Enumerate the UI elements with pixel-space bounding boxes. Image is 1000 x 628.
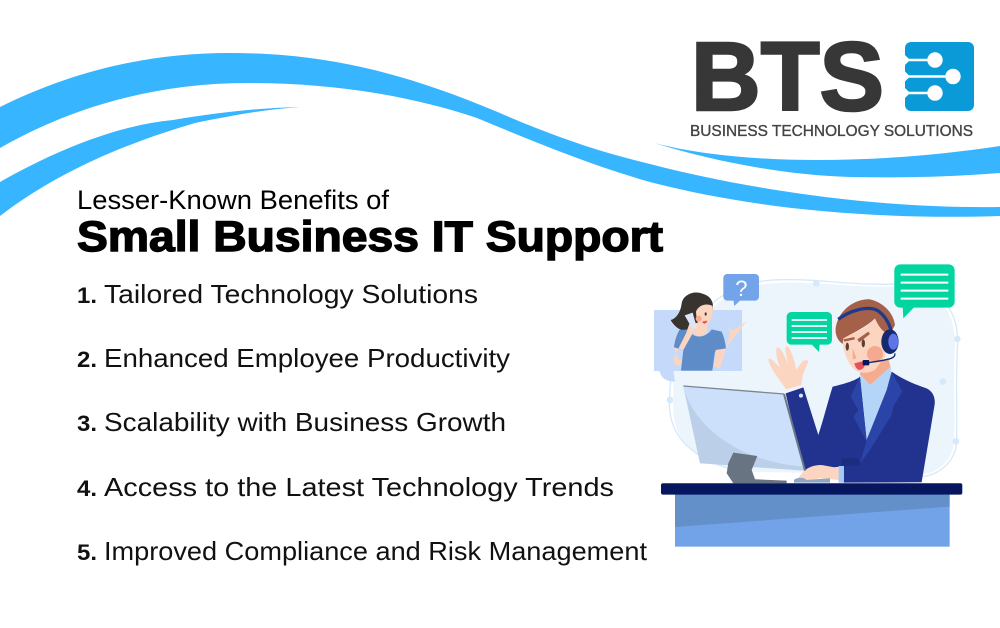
illustration: IT support agent at desk <box>654 264 962 547</box>
woman neck <box>691 322 707 338</box>
agent lapels <box>851 377 867 442</box>
item 1: Tailored Technology Solutions <box>104 279 478 309</box>
wave: right swoosh under logo <box>654 143 1000 177</box>
agent typing hand <box>798 465 839 482</box>
small chat bubble <box>787 312 832 352</box>
logo wordmark: BTS <box>691 22 884 131</box>
agent shirt <box>860 367 892 442</box>
eyes and brows <box>843 332 870 351</box>
item 5: 5. <box>77 540 97 565</box>
logo tagline: BUSINESS TECHNOLOGY SOLUTIONS <box>690 123 973 140</box>
logo <box>690 22 974 140</box>
agent suit <box>786 372 935 483</box>
woman left arm <box>674 320 696 366</box>
agent cuff button <box>799 394 803 398</box>
item 2: 2. <box>77 347 97 372</box>
raised hand <box>768 346 808 389</box>
monitor stand <box>727 453 787 483</box>
woman right arm <box>714 321 747 368</box>
wave: large top band <box>0 53 1000 217</box>
woman face <box>696 304 713 325</box>
hair <box>836 299 895 344</box>
subtitle: Lesser-Known Benefits of <box>77 185 389 215</box>
wave: left swoosh <box>0 107 300 216</box>
item 1: 1. <box>77 283 97 308</box>
large chat bubble <box>894 264 955 318</box>
agent neck <box>860 358 891 385</box>
list of benefits <box>77 279 648 566</box>
item 3: Scalability with Business Growth <box>104 407 506 437</box>
item 3: 3. <box>77 411 97 436</box>
cheek <box>867 346 883 362</box>
title: Small Business IT Support <box>77 213 663 261</box>
item 4: Access to the Latest Technology Trends <box>104 472 614 502</box>
nose <box>853 348 857 359</box>
question bubble <box>723 274 759 306</box>
mouth <box>854 361 865 370</box>
agent <box>768 299 935 483</box>
item 4: 4. <box>77 476 97 501</box>
face <box>842 318 888 373</box>
agent head <box>768 299 899 389</box>
headset <box>838 308 899 365</box>
background blob <box>667 280 961 477</box>
monitor <box>683 386 805 483</box>
woman hair <box>671 292 713 331</box>
woman phone <box>685 313 697 329</box>
woman shirt <box>674 329 726 371</box>
item 5: Improved Compliance and Risk Management <box>104 536 648 566</box>
question bubble: ? <box>735 276 747 301</box>
desk <box>661 483 962 547</box>
logo icon <box>905 42 974 111</box>
item 2: Enhanced Employee Productivity <box>104 343 510 373</box>
woman on call panel <box>654 292 747 382</box>
